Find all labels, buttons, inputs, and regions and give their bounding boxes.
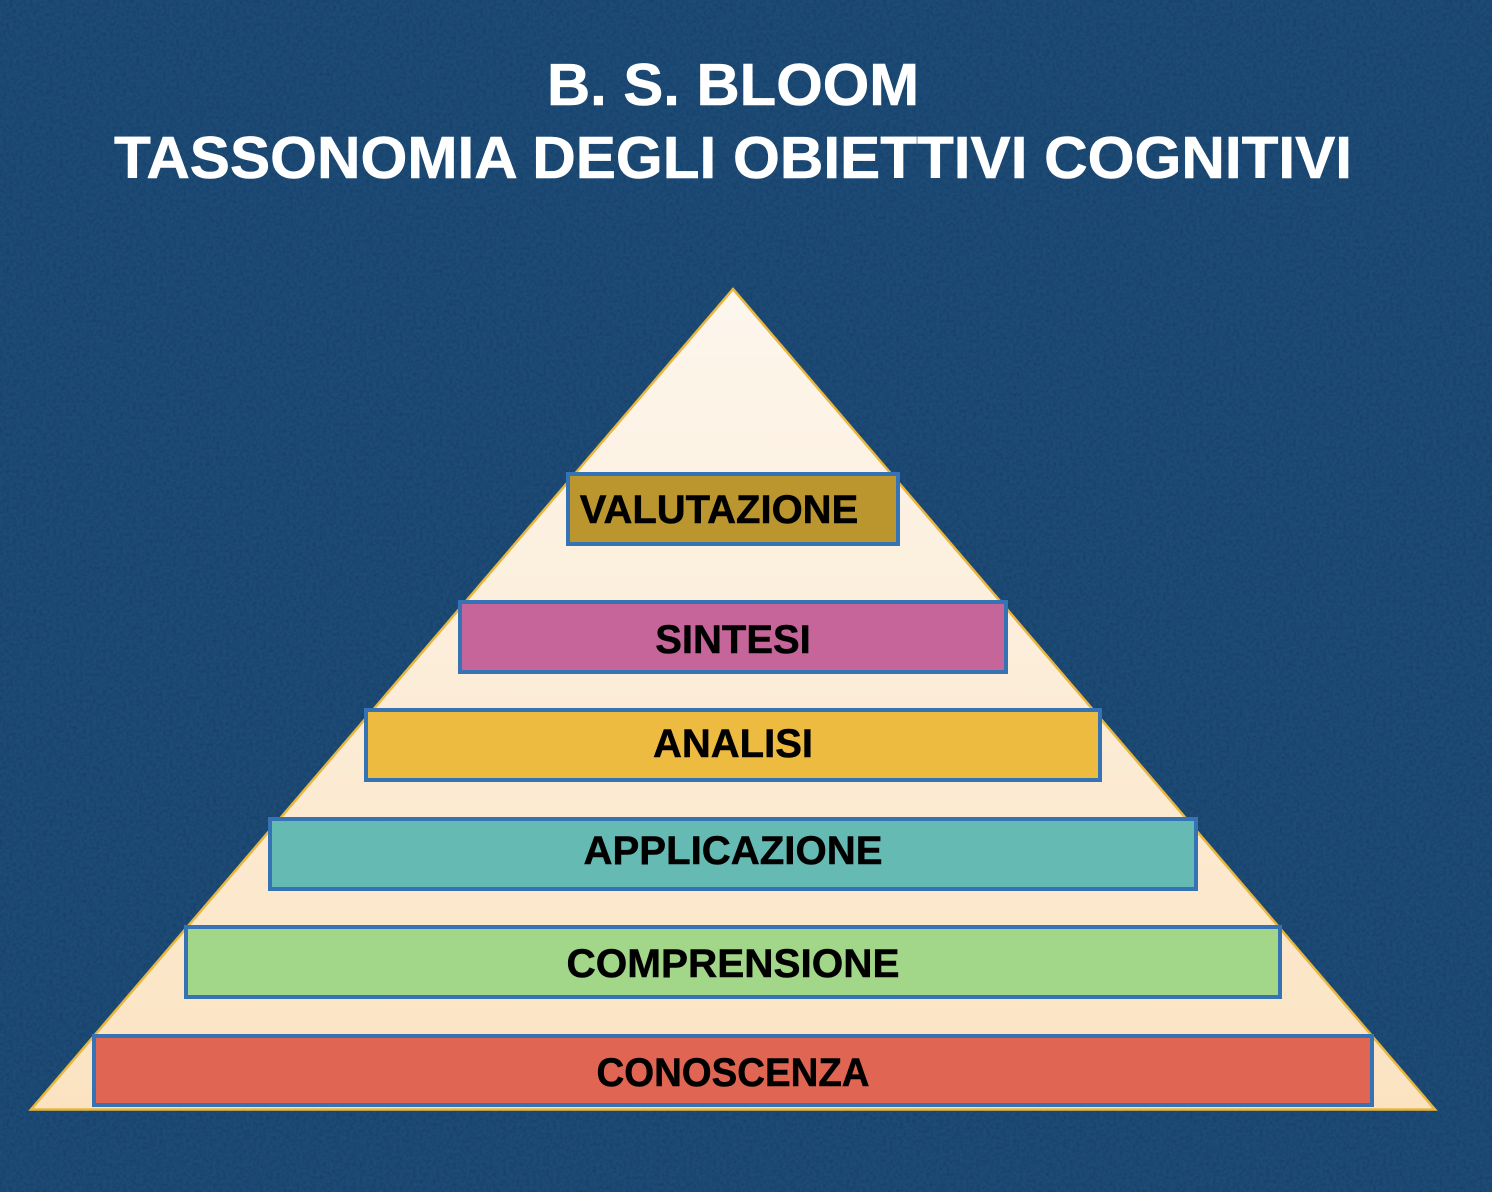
level: sintesi: SINTESI (655, 618, 811, 662)
level: valutazione: VALUTAZIONE (580, 488, 858, 532)
level: applicazione: APPLICAZIONE (584, 829, 882, 873)
level: analisi: ANALISI (653, 722, 813, 766)
title (114, 52, 1352, 191)
level: applicazione (270, 819, 1196, 889)
title: B. S. BLOOM (547, 52, 919, 118)
pyramid (31, 289, 1435, 1110)
level: analisi (366, 710, 1100, 780)
level: comprensione: COMPRENSIONE (566, 942, 900, 986)
level: sintesi (460, 602, 1006, 672)
title: TASSONOMIA DEGLI OBIETTIVI COGNITIVI (114, 125, 1352, 191)
level: valutazione (568, 474, 898, 544)
level: comprensione (186, 927, 1280, 997)
level: conoscenza: CONOSCENZA (596, 1051, 870, 1095)
level: conoscenza (94, 1036, 1372, 1105)
